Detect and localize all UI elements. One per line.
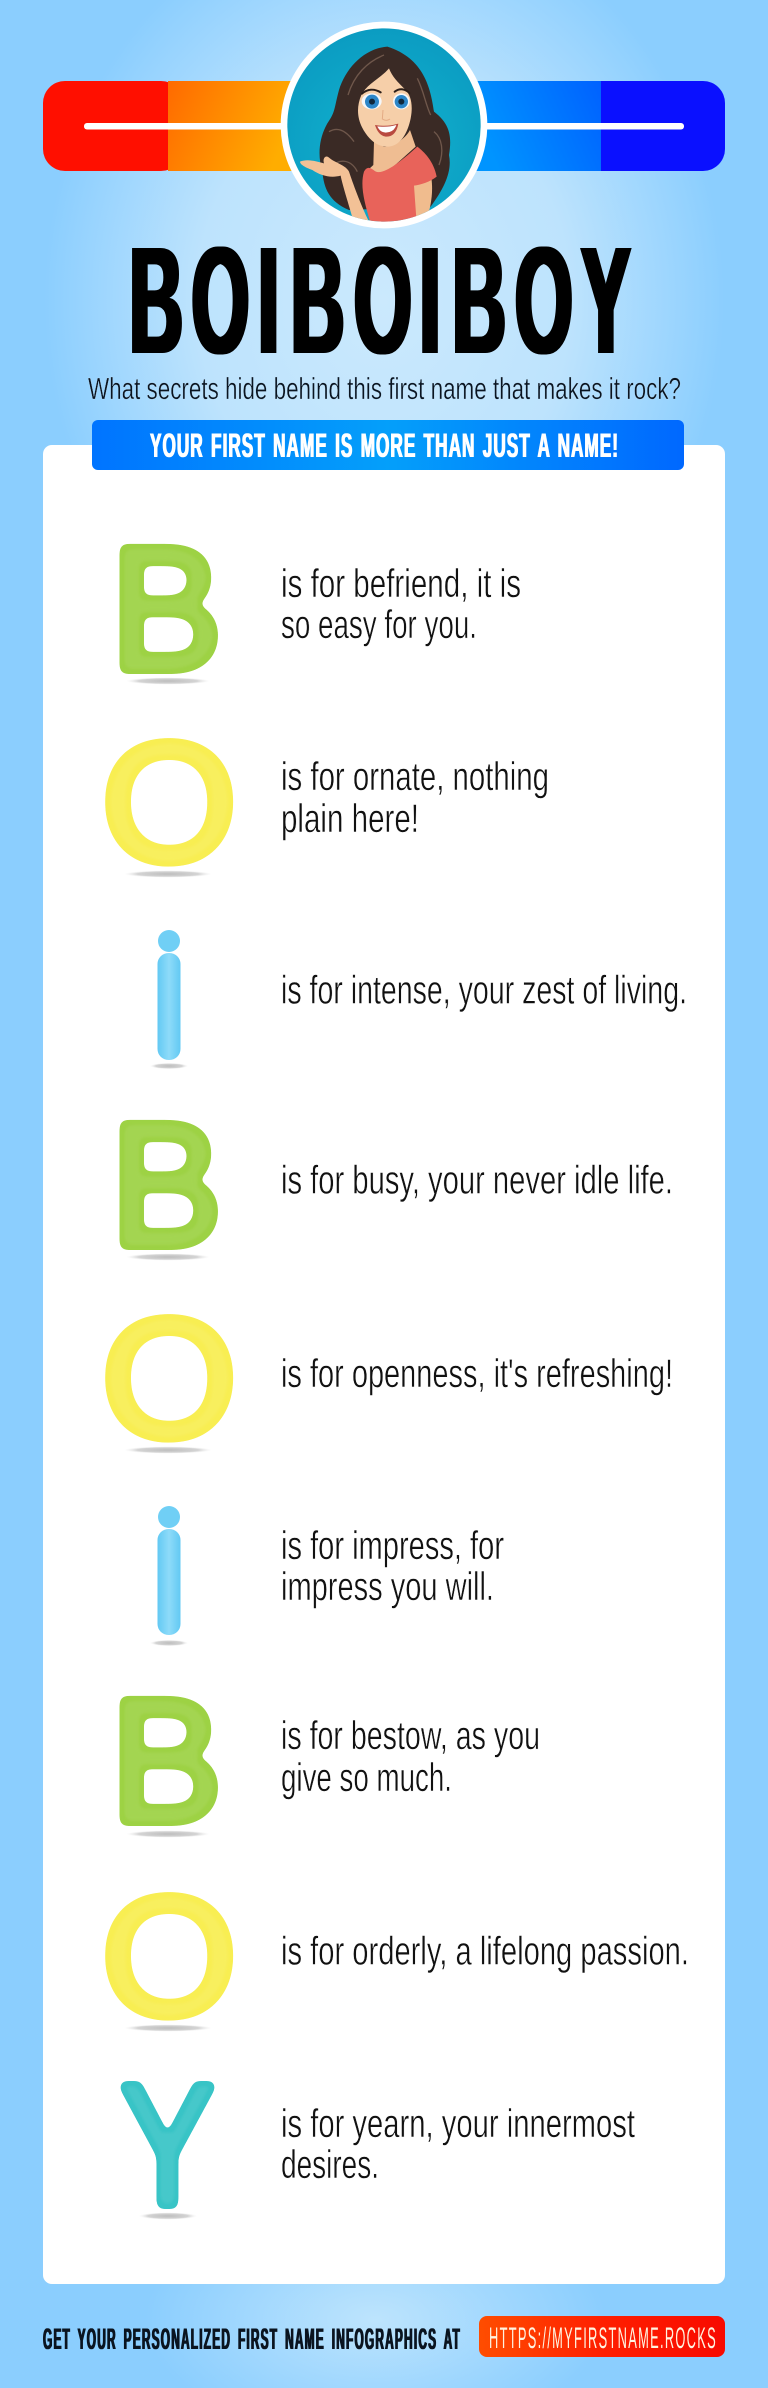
text: yearn	[281, 2102, 635, 2187]
row: B bestow	[110, 1662, 540, 1859]
row: B busy	[110, 1086, 673, 1283]
title: BOIBOIBOY	[130, 217, 630, 386]
text: yearn: is for yearn, your innermost	[281, 2102, 635, 2146]
text: impress: impress you will.	[281, 1565, 494, 1609]
icon: portrait of woman in a circle	[281, 22, 487, 228]
icon: green letter B: B	[110, 1662, 223, 1859]
icon: yellow letter O: O	[102, 1863, 237, 2051]
text: ornate	[281, 755, 549, 841]
text: bestow: give so much.	[281, 1756, 452, 1800]
icon: blue letter i	[150, 1506, 188, 1646]
text: ornate: is for ornate, nothing	[281, 755, 549, 799]
text: befriend	[281, 562, 521, 647]
text: bestow: is for bestow, as you	[281, 1714, 540, 1758]
text: befriend: so easy for you.	[281, 603, 477, 647]
icon: green letter B: B	[110, 510, 223, 707]
text: befriend: is for befriend, it is	[281, 562, 521, 606]
row: O orderly	[102, 1863, 689, 2051]
row: B befriend	[110, 510, 521, 707]
footer url button	[479, 2316, 725, 2357]
banner: tagline	[92, 420, 684, 470]
icon: teal letter Y: Y	[121, 2049, 214, 2240]
text: ornate: plain here!	[281, 797, 419, 841]
row: O openness	[102, 1285, 673, 1473]
text: bestow	[281, 1714, 540, 1800]
row: i intense	[150, 930, 687, 1069]
text: yearn: desires.	[281, 2143, 379, 2187]
row: Y yearn	[121, 2049, 635, 2240]
icon: yellow letter O: O	[102, 709, 237, 897]
icon: yellow letter O: O	[102, 1285, 237, 1473]
icon: green letter B: B	[110, 1086, 223, 1283]
icon: blue letter i	[150, 930, 188, 1069]
row: O ornate	[102, 709, 549, 897]
text: impress	[281, 1524, 504, 1609]
text: impress: is for impress, for	[281, 1524, 504, 1568]
header ribbon	[43, 81, 725, 171]
row: i impress	[150, 1506, 504, 1646]
panel: letters card	[43, 445, 725, 2284]
